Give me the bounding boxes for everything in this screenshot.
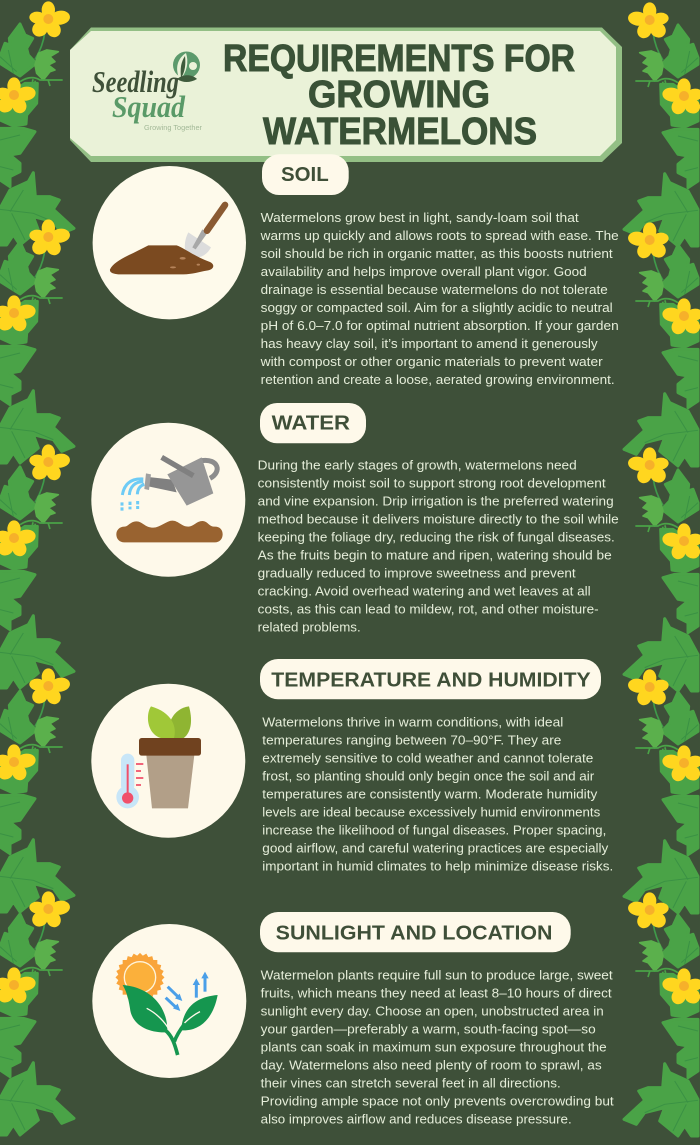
logo: Seedling Squad: Squad: [112, 89, 185, 124]
text block: sunlight and location: Providing ample space not only prevents overcrowding but: [261, 1093, 614, 1108]
icon: soil mound and trowel: [93, 166, 246, 319]
heading: soil: [262, 154, 349, 195]
text block: temperature and humidity: temperatures are consistently warm. Moderate humidity: [262, 786, 598, 801]
icon: watering can over soil: [91, 423, 245, 577]
heading: sunlight and location: [260, 912, 571, 952]
heading: soil: SOIL: [281, 164, 329, 186]
text block: soil: soggy or compacted soil. Aim for a slightly acidic to neutral: [261, 300, 613, 315]
icon: sun, plant and arrows: [92, 924, 246, 1078]
text block: temperature and humidity: important in humid climates to help minimize disease risks.: [262, 858, 613, 873]
heading: temperature and humidity: [260, 659, 601, 699]
text block: temperature and humidity: Watermelons thrive in warm conditions, with ideal: [262, 714, 563, 729]
text block: temperature and humidity: frost, so planting should only begin once the soil and air: [262, 768, 595, 783]
text block: soil: has heavy clay soil, it’s important to amend it generously: [261, 336, 598, 351]
text block: sunlight and location: plants can soak in maximum sun exposure throughout the: [261, 1039, 607, 1054]
text block: sunlight and location: fruits, which means they need at least 8–10 hours of direct: [261, 985, 612, 1000]
text block: sunlight and location: sunlight every day. Choose an open, unobstructed area in: [261, 1003, 604, 1018]
title: GROWING: [308, 74, 490, 116]
text block: water: cracking. Avoid overhead watering and wet leaves at all: [258, 583, 591, 598]
text block: sunlight and location: day. Watermelons also need plenty of room to sprawl, as: [261, 1057, 602, 1072]
heading: water: [260, 403, 366, 443]
title: [223, 38, 575, 153]
text block: temperature and humidity: good airflow, and careful watering practices are especially: [262, 840, 609, 855]
text block: water: gradually reduced to improve sweetness and prevent: [258, 565, 576, 580]
logo: Seedling Squad: [92, 52, 203, 132]
text block: water: method because it delivers moisture directly to the soil while: [258, 511, 619, 526]
text block: water: and vine expansion. Drip irrigation is the preferred watering: [258, 493, 614, 508]
heading: sunlight and location: SUNLIGHT AND LOCATION: [276, 922, 552, 944]
text block: sunlight and location: their vines can stretch several feet in all directions.: [261, 1075, 561, 1090]
text block: sunlight and location: also improves airflow and reduces disease pressure.: [261, 1111, 572, 1126]
text block: water: consistently moist soil to support strong root development: [258, 475, 606, 490]
text block: soil: soil should be rich in organic matter, as this boosts nutrient: [261, 246, 613, 261]
text block: sunlight and location: Watermelon plants require full sun to produce large, sweet: [261, 967, 613, 982]
text block: soil: [260, 210, 619, 387]
header banner: [70, 28, 622, 162]
text block: water: keeping the foliage dry, reducing the risk of fungal diseases.: [258, 529, 615, 544]
logo: Seedling Squad: Seedling: [92, 64, 179, 99]
left vine border with yellow flowers: [0, 1, 74, 1135]
text block: water: During the early stages of growth, watermelons need: [258, 457, 577, 472]
text block: soil: Watermelons grow best in light, sandy-loam soil that: [261, 210, 579, 225]
right vine border with yellow flowers: [624, 2, 700, 1136]
title: REQUIREMENTS FOR: [223, 38, 575, 80]
text block: temperature and humidity: levels are ideal because excessively humid environments: [262, 804, 601, 819]
title: WATERMELONS: [263, 111, 537, 153]
text block: sunlight and location: [261, 967, 614, 1126]
text block: temperature and humidity: temperatures ranging between 70–90°F. They are: [262, 732, 561, 747]
text block: soil: warms up quickly and allows roots to spread with ease. The: [260, 228, 619, 243]
text block: temperature and humidity: [262, 714, 613, 873]
text block: temperature and humidity: increase the likelihood of fungal diseases. Proper spacing,: [262, 822, 606, 837]
text block: soil: drainage is essential because watermelons do not tolerate: [261, 282, 608, 297]
logo: Seedling Squad: Growing Together: [144, 125, 203, 132]
text block: soil: pH of 6.0–7.0 for optimal nutrient absorption. If your garden: [261, 318, 619, 333]
text block: water: As the fruits begin to mature and ripen, watering should be: [258, 547, 612, 562]
text block: water: [258, 457, 619, 634]
text block: soil: with compost or other organic materials to prevent water: [260, 354, 603, 369]
text block: temperature and humidity: extremely sensitive to cold weather and cannot tolerate: [262, 750, 593, 765]
text block: water: costs, as this can lead to mildew, rot, and other moisture-: [258, 601, 599, 616]
text block: water: related problems.: [258, 619, 361, 634]
icon: potted seedling and thermometer: [91, 684, 245, 838]
text block: sunlight and location: your garden—preferably a warm, south-facing spot—so: [261, 1021, 596, 1036]
text block: soil: retention and create a loose, aerated growing environment.: [261, 372, 615, 387]
heading: temperature and humidity: TEMPERATURE AND HUMIDITY: [271, 669, 591, 691]
text block: soil: availability and helps improve overall plant vigor. Good: [261, 264, 587, 279]
heading: water: WATER: [272, 412, 351, 434]
